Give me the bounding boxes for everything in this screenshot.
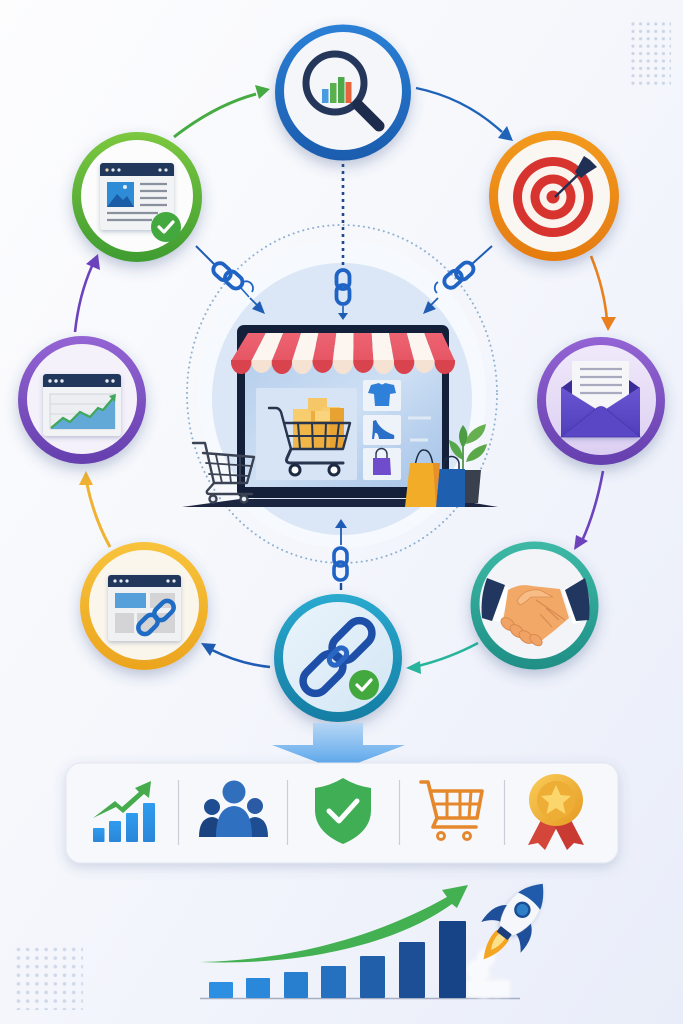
icon: magnifier with bars <box>306 54 379 126</box>
connector: bottom chain and arrow <box>334 519 347 590</box>
green growth arrow <box>200 885 468 962</box>
results panel <box>66 763 618 863</box>
cycle arrow: orange <box>591 256 616 331</box>
node: content page <box>72 132 202 262</box>
icon: trust shield <box>315 778 371 844</box>
node: handshake partnership <box>470 542 598 670</box>
connector: right chain and arrow <box>423 246 492 314</box>
shopping cart with boxes <box>269 398 350 475</box>
node: web page with link <box>80 542 208 670</box>
cycle arrow: purple right <box>574 471 603 550</box>
online store laptop illustration <box>182 325 498 507</box>
laptop screen <box>237 325 449 498</box>
cycle arrow: purple left <box>75 254 100 332</box>
baseline <box>200 998 520 1000</box>
icon: handshake <box>482 578 590 648</box>
icon: browser with chain <box>108 575 181 641</box>
bars <box>209 921 466 998</box>
store content panel <box>256 388 357 480</box>
connector: left chain and arrow <box>196 246 265 314</box>
dot pattern top right <box>630 21 671 89</box>
laptop base <box>182 499 498 507</box>
icon: envelope with letter <box>561 361 640 437</box>
small shopping cart <box>193 443 254 502</box>
icon: web page with check <box>100 163 181 242</box>
cycle arrow: blue <box>416 88 513 141</box>
icon: growth bars <box>93 781 155 842</box>
icon: orange cart <box>421 782 482 840</box>
down arrow to results panel <box>272 723 405 764</box>
node: target <box>489 131 619 261</box>
product tile: shirt <box>363 380 401 411</box>
plant in pot <box>449 424 487 503</box>
dot pattern bottom left <box>15 946 83 1010</box>
cycle arrow: yellow <box>79 471 110 547</box>
central hub: dotted orbit and pale disc <box>187 225 497 563</box>
node: verified backlink <box>274 594 402 722</box>
shopping bag blue <box>436 456 465 507</box>
bottom growth chart with rocket <box>200 868 563 999</box>
rocket <box>464 868 563 975</box>
panel dividers <box>178 780 504 845</box>
connector: top dotted line, chain and arrow <box>336 164 350 320</box>
cycle arrow: green <box>174 85 270 137</box>
fingers <box>499 615 544 648</box>
icon: browser with growth chart <box>43 374 121 436</box>
node: email outreach <box>537 337 665 465</box>
icon: bullseye with dart <box>513 156 597 237</box>
shopping bag yellow <box>405 450 440 507</box>
rocket smoke <box>467 949 510 999</box>
icon: audience group <box>199 780 268 837</box>
cycle arrow: dark blue <box>201 643 270 667</box>
product tile: bag <box>363 448 401 480</box>
node: analytics chart <box>18 336 146 464</box>
node: keyword research magnifier <box>275 24 411 160</box>
icon: award medal <box>528 774 584 850</box>
awning <box>231 333 455 374</box>
icon: chain links with check <box>298 615 379 700</box>
cycle arrow: teal <box>406 643 478 674</box>
product tile: shoe <box>363 415 401 445</box>
